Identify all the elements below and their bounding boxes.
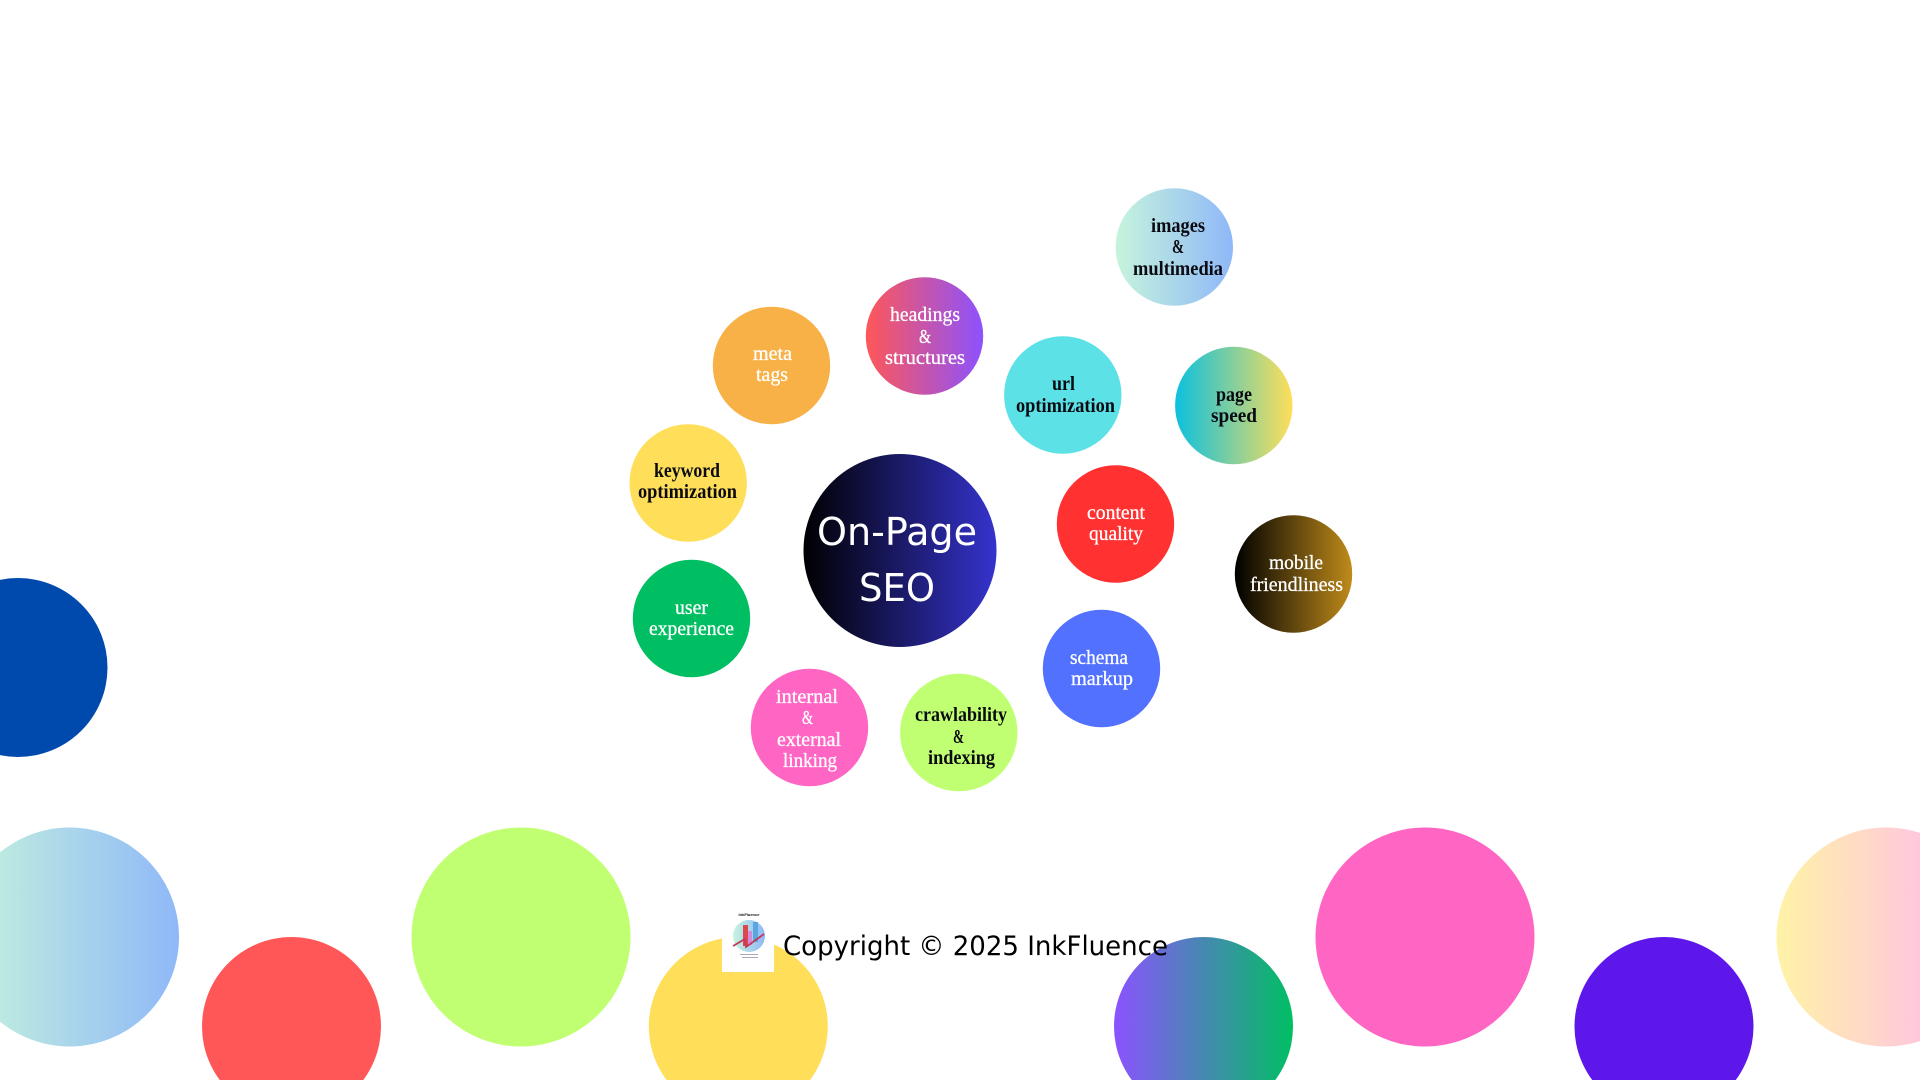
bubble: headings & structures: & bbox=[919, 326, 931, 348]
bubble: content quality: quality bbox=[1089, 523, 1144, 545]
bubble: meta tags: tags bbox=[756, 364, 788, 386]
bubble: schema markup: markup bbox=[1071, 668, 1133, 690]
bubble: headings & structures: structures bbox=[885, 347, 965, 369]
bubble: page speed: speed bbox=[1211, 405, 1258, 427]
decorative circle: royal blue left bbox=[0, 578, 108, 757]
bubble: crawlability & indexing: crawlability bbox=[915, 704, 1008, 726]
bubble: crawlability & indexing: indexing bbox=[928, 747, 996, 769]
bubble: internal & external linking: linking bbox=[783, 750, 837, 772]
bubble: mobile friendliness: mobile bbox=[1269, 552, 1323, 574]
bubble: keyword optimization: optimization bbox=[638, 481, 738, 503]
bubble: internal & external linking: & bbox=[802, 707, 813, 729]
bubble: mobile friendliness: friendliness bbox=[1250, 574, 1343, 596]
decorative circle: peach bbox=[1776, 828, 1920, 1046]
decorative circle: pink bbox=[1316, 828, 1534, 1046]
logo: InkFluence badge bbox=[722, 908, 774, 972]
bubble: url optimization: optimization bbox=[1016, 395, 1116, 417]
bubble: meta tags: meta bbox=[753, 343, 792, 365]
bubble: crawlability & indexing bbox=[900, 674, 1018, 791]
central bubble: On-Page SEO: On-Page bbox=[817, 510, 977, 554]
bubble: page speed bbox=[1175, 347, 1293, 464]
central bubble: On-Page SEO: SEO bbox=[859, 566, 935, 610]
bubble: content quality bbox=[1057, 465, 1174, 583]
decorative circle: coral red bbox=[202, 937, 381, 1080]
bubble: user experience bbox=[633, 560, 750, 677]
bubble: internal & external linking: internal bbox=[776, 686, 838, 708]
bubble: user experience: experience bbox=[649, 618, 734, 640]
bubble: keyword optimization bbox=[630, 424, 747, 542]
decorative circle: violet bbox=[1574, 937, 1754, 1080]
bubble: url optimization: url bbox=[1052, 373, 1075, 395]
bubble: content quality: content bbox=[1087, 502, 1145, 524]
bubble: user experience: user bbox=[675, 597, 708, 619]
central bubble: On-Page SEO bbox=[804, 454, 996, 647]
decorative circle: purple to green bbox=[1114, 937, 1293, 1080]
bubble: mobile friendliness bbox=[1235, 515, 1352, 633]
bubble: schema markup: schema bbox=[1070, 647, 1128, 669]
bubble: headings & structures bbox=[866, 277, 983, 395]
bubble: images & multimedia bbox=[1116, 188, 1233, 306]
bubble: internal & external linking: external bbox=[777, 729, 841, 751]
bubble: crawlability & indexing: & bbox=[953, 726, 964, 748]
decorative circle: yellow bbox=[649, 937, 828, 1080]
bubble: schema markup bbox=[1043, 610, 1160, 727]
bubble: page speed: page bbox=[1216, 384, 1252, 406]
bubble: headings & structures: headings bbox=[890, 304, 960, 326]
bubble: keyword optimization: keyword bbox=[654, 460, 721, 482]
logo: InkFluence badge: InkFluence bbox=[739, 912, 760, 917]
bubble: images & multimedia: multimedia bbox=[1133, 258, 1223, 280]
bubble: internal & external linking bbox=[751, 669, 868, 786]
footer: copyright: Copyright © 2025 InkFluence bbox=[783, 931, 1168, 962]
decorative circle: mint to blue bbox=[0, 828, 179, 1046]
bubble: meta tags bbox=[713, 307, 830, 424]
bubble: images & multimedia: & bbox=[1172, 236, 1184, 258]
decorative circle: lime bbox=[412, 828, 630, 1046]
bubble: url optimization bbox=[1004, 336, 1122, 454]
bubble: images & multimedia: images bbox=[1151, 215, 1205, 237]
